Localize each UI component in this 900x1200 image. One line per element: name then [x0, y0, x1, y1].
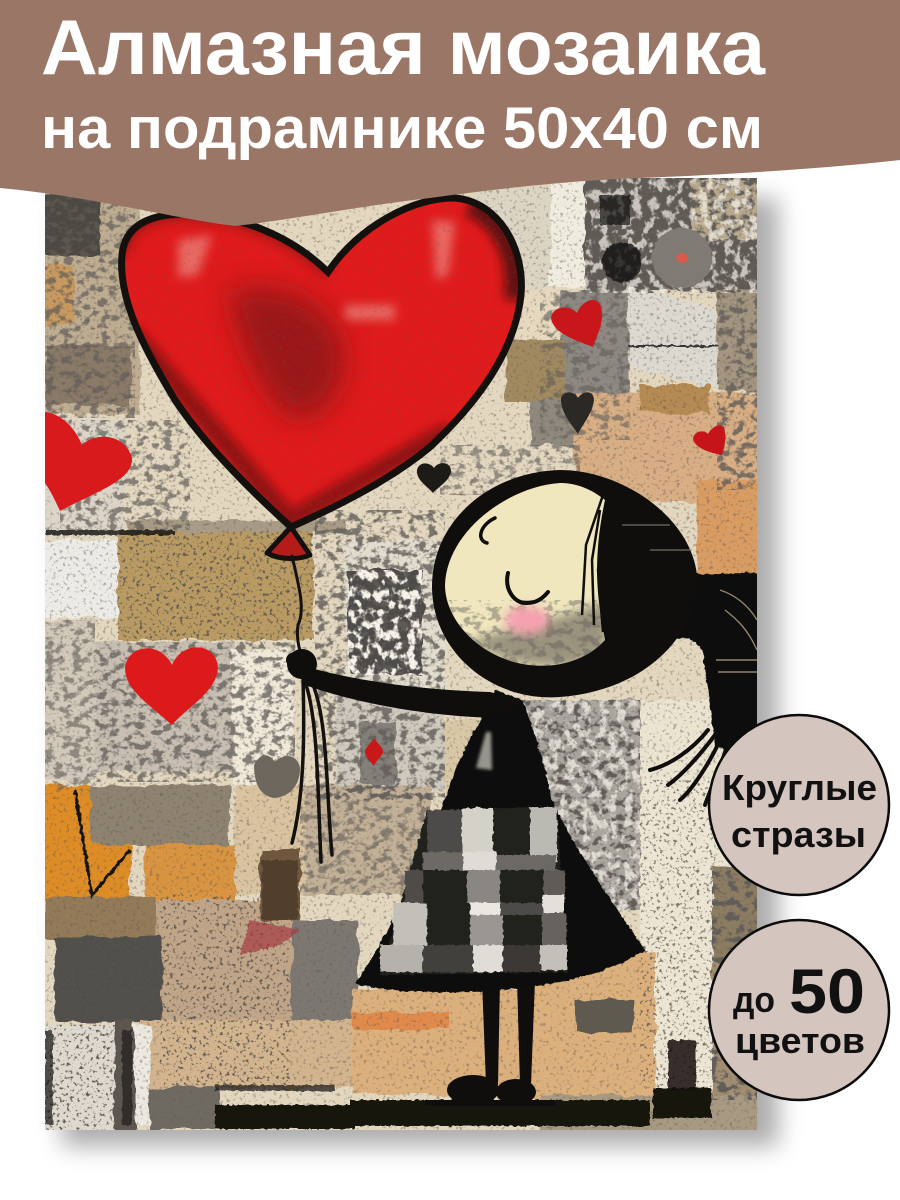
badge: round rhinestones: Круглые	[722, 767, 877, 808]
newspaper speckle	[45, 178, 757, 1130]
canvas shadow	[62, 198, 778, 1146]
dark hearts	[254, 392, 594, 798]
girl dress	[355, 690, 645, 992]
girl legs and feet	[425, 980, 555, 1106]
badge: up to 50 colours	[709, 920, 889, 1100]
balloon knot	[267, 527, 310, 559]
badge: round rhinestones	[709, 715, 889, 895]
dress pattern: check	[380, 807, 567, 975]
subtitle: на подрамнике 50х40 см	[41, 96, 763, 161]
balloon heart	[120, 198, 525, 535]
red hearts	[45, 300, 725, 766]
badge: up to 50 colours: цветов	[735, 1020, 865, 1061]
badge: up to 50 colours: 50	[789, 957, 865, 1027]
collage background	[40, 175, 762, 1135]
dark collage marks	[45, 195, 718, 1129]
balloon string	[292, 556, 332, 862]
badge: round rhinestones: стразы	[731, 814, 866, 855]
girl ponytail	[650, 570, 760, 805]
header banner	[0, 0, 900, 226]
girl closed eye	[507, 573, 548, 603]
badge: up to 50 colours: до	[733, 979, 775, 1020]
girl eyebrow	[481, 518, 495, 543]
girl arm and hand	[286, 649, 494, 718]
title: Алмазная мозаика	[41, 3, 766, 91]
girl cheek	[505, 606, 549, 634]
painting: girl with heart balloon	[40, 175, 762, 1135]
girl head	[432, 470, 697, 697]
